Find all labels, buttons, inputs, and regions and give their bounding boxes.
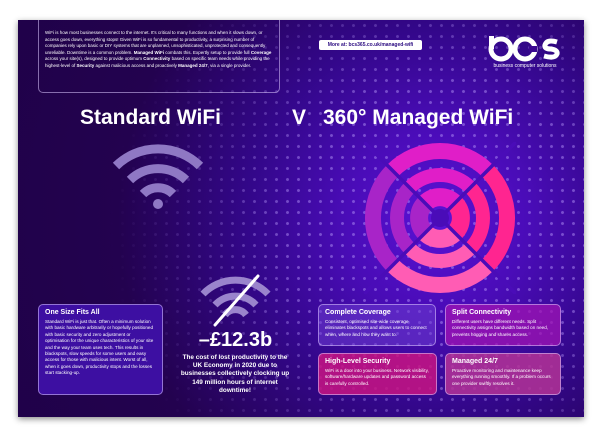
panel: high-level security (318, 353, 437, 395)
panel: complete coverage (318, 304, 436, 346)
panel: one size fits all: One Size Fits All (45, 309, 100, 316)
title: V: V (292, 106, 306, 129)
panel: high-level security: WiFi is a door into your business. Network visibility, software/hardware updates and password access is carefully controlled. (325, 368, 429, 386)
panel: complete coverage: Complete Coverage (325, 309, 391, 316)
panel: managed 24/7: Proactive monitoring and maintenance keep everything running smoothly. If a problem occurs one provider swiftly resolves it. (452, 368, 551, 386)
logo: bcs: business computer solutions (493, 63, 557, 69)
panel: managed 24/7: Managed 24/7 (452, 358, 498, 365)
intro text box (38, 14, 280, 93)
logo: bcs (488, 36, 560, 69)
panel: one size fits all: Standard WiFi is just that. Often a minimum solution with basic hardware arbitrarily or hopefully positioned with basic security and zero adjustment or optimisation for the unique characteristics of your site and the way your team uses tech. This results in blackspots, slow speeds for some users and easy access for those with malicious intent. Worst of all, when it goes down, productivity stops and the losses start stacking-up. (45, 319, 153, 375)
stat caption: The cost of lost productivity to the UK Economy in 2020 due to businesses collectively clocking up 149 million hours of internet downtime! (181, 354, 289, 394)
url pill (319, 40, 422, 50)
title: Standard WiFi: Standard WiFi (80, 106, 221, 129)
panel: split connectivity: Different users have different needs. Split connectivity assigns bandwidth based on need, prevents hogging and shares access. (452, 319, 548, 337)
panel: split connectivity (445, 304, 561, 346)
panel: managed 24/7 (445, 353, 561, 395)
panel: one size fits all (38, 304, 163, 395)
icon: standard wifi (112, 144, 203, 209)
title: 360 Managed WiFi: 360° Managed WiFi (323, 106, 513, 129)
panel: complete coverage: Consistent, optimised site-wide coverage eliminates blackspots and allows users to connect when, where and how they want to. (325, 319, 427, 337)
url pill: More at: bcs365.co.uk/managed-wifi (328, 42, 413, 48)
icon: crossed-out wifi (200, 274, 270, 327)
icon: managed wifi target (364, 142, 516, 293)
intro text box: WiFi is how most businesses connect to the internet. It's critical to many functions and when it slows down, or access goes down, everything stops! Given WiFi is so fundamental to productivity, a surprising number of companies rely upon basic or DIY systems that are unplanned, unsophisticated, unprotected and consequently unreliable. Downtime is a common problem. Managed WiFi combats this. Expertly setup to provide full Coverage across your site(s), designed to provide optimum Connectivity based on specific team needs while providing the highest-level of Security against malicious access and proactively Managed 24/7, via a single provider. (45, 30, 271, 68)
panel: split connectivity: Split Connectivity (452, 309, 511, 316)
stat: -£12.3b: –£12.3b (199, 329, 272, 351)
panel: high-level security: High-Level Security (325, 358, 390, 365)
